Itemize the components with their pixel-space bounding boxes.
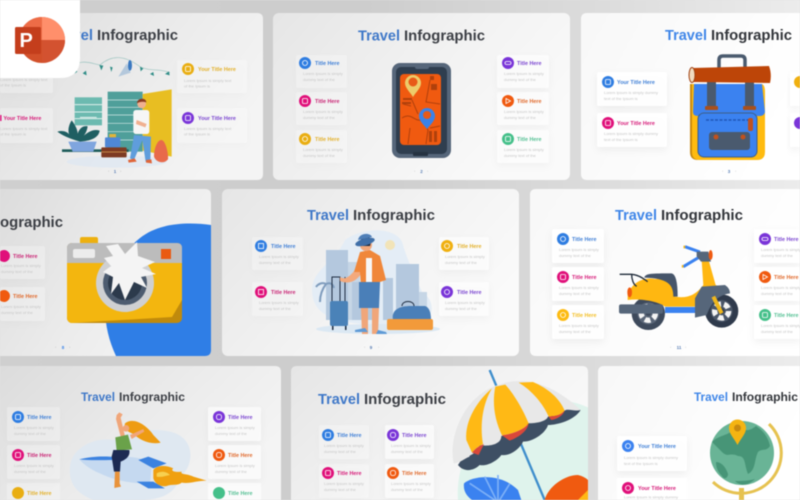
card: blue: text of the Ipsum is [624,461,658,466]
card: pink, cropped: Lorem Ipsum is simply [1,263,41,268]
card: purple: dummy text of the [391,449,424,454]
slide 7: rocket [0,366,281,500]
card: purple [439,282,489,316]
card: pink: Lorem Ipsum is simply [259,300,299,305]
card: yellow: Lorem Ipsum is simply [559,323,599,328]
card: orange [497,92,549,125]
slide 7 title: Travel [81,390,115,404]
card: pink, cropped: Title Here [13,254,37,260]
card: pink: Lorem Ipsum is simply dummy [624,494,678,500]
slide 5 title [307,207,435,224]
card: blue: dummy text of the [14,431,47,436]
pagination [722,168,737,174]
slide 3 title [665,27,792,44]
card: yellow: Title Here [457,244,481,250]
pagination: ‹ [670,344,672,350]
card: yellow: dummy text of the [559,329,592,334]
card: pink: dummy text of the [259,306,292,311]
card: yellow [439,237,489,270]
card: green: dummy text of the [504,153,537,158]
card: orange: dummy text of the [504,115,537,120]
card: blue [319,425,369,459]
card: yellow: Title Here [315,137,339,143]
card: blue: Lorem Ipsum is simply [14,425,54,430]
slide 1 title: Travel [50,27,93,44]
card: blue: text of the Ipsum is [604,96,638,101]
slide 3 title: Travel [665,27,707,44]
card: blue: dummy text of the [303,77,336,82]
slide 1 title [50,27,178,44]
slide 6 panel [530,189,800,356]
card: orange: Title Here [774,275,798,281]
card: pink [7,445,60,479]
slide 3 panel [581,13,800,180]
pagination: › [120,168,122,174]
card: right top [177,60,247,93]
card: green: Lorem Ipsum is simply [504,147,544,152]
card: yellow: Lorem Ipsum is simply [445,254,485,259]
card: green [497,130,549,163]
card: pink: Lorem Ipsum is simply [14,463,54,468]
pagination [108,168,122,174]
card: yellow: dummy text of the [303,153,336,158]
card: pink [319,464,369,498]
card: purple: Lorem Ipsum is simply [761,247,800,252]
card: blue [296,55,347,88]
blue backdrop shape [105,223,211,356]
slide 9 title: Travel [694,390,728,404]
card: purple [754,229,800,263]
pagination: ‹ [364,344,366,350]
card: orange: Lorem Ipsum is simply [504,109,544,114]
slide 6 title [615,207,743,224]
card: right top: Lorem Ipsum is simply text [184,78,232,83]
card: green [208,483,261,500]
pagination: › [735,168,737,174]
card: blue: Title Here [572,237,596,243]
card: purple: Lorem Ipsum is simply [391,443,431,448]
card: orange: Title Here [517,99,541,105]
illustration: beach umbrella and shells [453,370,588,500]
card: left bottom: Lorem Ipsum is simply text [0,126,48,131]
card: blue: dummy text of the [559,253,592,258]
card: blue: dummy text of the [259,260,292,265]
card: blue [597,72,667,106]
card: left top [0,60,53,93]
card: orange: Lorem Ipsum is simply [215,463,255,468]
slide 7 title: Infographic [119,390,185,404]
card: purple: Title Here [774,237,798,243]
card: purple: Title Here [402,433,426,439]
card: pink [617,478,687,500]
slide 3 title: Infographic [711,27,792,44]
slide 1 title: Infographic [97,27,178,44]
card: blue: Lorem Ipsum is simply dummy [604,90,658,95]
card: pink: dummy text of the [324,487,357,492]
slide 4: camera [0,189,211,356]
slide 4 panel [0,189,211,356]
slide 9 title: Infographic [732,390,798,404]
card: pink: Your Title Here [638,486,676,492]
card: left bottom [0,108,53,143]
card: orange [385,464,434,498]
slide 8: beach umbrella [291,366,588,500]
card: blue [7,407,60,441]
slide 6 title: Travel [615,207,657,224]
card: pink: dummy text of the [559,291,592,296]
card: left top: Lorem Ipsum is simply text [0,77,48,82]
pagination [364,344,380,350]
card: pink: Lorem Ipsum is simply [559,285,599,290]
card: purple: Title Here [517,61,541,67]
pagination: 11 [677,345,682,350]
white tab [0,0,80,78]
slide 7 title [81,390,185,404]
card: pink: Title Here [315,99,339,105]
slide 9: globe [598,366,800,500]
card: blue: Title Here [271,244,295,250]
slide 5 title: Infographic [353,207,435,224]
pagination: › [378,344,380,350]
slide 1: door and traveller [0,13,263,180]
slide 2 panel [273,13,570,180]
slide 4 title: ographic [0,214,63,231]
card: orange: Title Here [402,471,426,477]
icon: PowerPoint logo: P [20,30,33,52]
pagination [670,344,687,350]
card: blue: Your Title Here [638,444,676,450]
card: blue: dummy text of the [324,449,357,454]
card: yellow [552,305,604,339]
card: blue [552,229,604,263]
slide 3: backpack [581,13,800,180]
card: purple [208,407,261,441]
card: green: Title Here [228,491,252,497]
card: orange, cropped: dummy text of the [1,310,34,315]
card: pink [296,92,347,125]
card: orange: Lorem Ipsum is simply [391,481,431,486]
card: purple [497,55,549,88]
pagination: 3 [728,169,731,174]
card: right top: Your Title Here [198,67,236,73]
card: green [754,305,800,339]
illustration: backpack [689,56,771,160]
slide 9 panel [598,366,800,500]
card: blue [252,237,303,270]
card: orange: Title Here [228,453,252,459]
slide 8 title: Travel [318,391,360,408]
slide 9 title [694,390,798,404]
illustration: camera [67,237,182,323]
card: yellow [296,130,347,163]
slide 8 title: Infographic [364,391,446,408]
card: purple: Lorem Ipsum is simply [504,71,544,76]
card: left bottom: of the Ipsum is [0,132,26,136]
pagination: › [685,344,687,350]
card: purple: Title Here [228,415,252,421]
card: blue: Lorem Ipsum is simply dummy [624,455,678,460]
pagination: › [69,344,71,350]
card: right bottom: Lorem Ipsum is simply text [184,126,232,131]
slide 6: scooter [530,189,800,356]
pagination: 8 [62,345,65,350]
pagination [414,168,429,174]
illustration: scooter [619,246,738,330]
card: blue: Lorem Ipsum is simply [324,443,364,448]
card: pink: Title Here [27,453,51,459]
pagination [55,344,71,350]
card: right bottom: of the Ipsum is [184,132,210,136]
card: orange: dummy text of the [761,291,794,296]
card: pink: Your Title Here [617,121,655,127]
slide 2 title [358,28,485,44]
card: purple [385,425,434,459]
card: yellow [7,483,60,500]
logo tab [0,0,80,78]
card: purple: Lorem Ipsum is simply [215,425,255,430]
slide 7 panel [0,366,281,500]
card: purple: dummy text of the [504,77,537,82]
card: purple: dummy text of the [761,253,794,258]
card: pink: Title Here [337,471,361,477]
pagination: 9 [370,345,373,350]
card: green: dummy text of the [761,329,794,334]
card: yellow: Title Here [572,313,596,319]
card: pink: dummy text of the [14,469,47,474]
card: pink: dummy text of the [303,115,336,120]
pagination: 2 [420,169,423,174]
illustration: tourist with luggage [312,230,440,334]
card: right top: of the Ipsum is [184,84,210,88]
card: pink, cropped: dummy text of the [1,269,34,274]
pagination: ‹ [722,168,724,174]
slide 5 panel [222,189,519,356]
card: blue: Lorem Ipsum is simply [559,247,599,252]
illustration: traveller at door [57,58,172,168]
slide 5: tourist in city [222,189,519,356]
card: blue: Your Title Here [617,80,655,86]
card: green: Title Here [517,137,541,143]
illustration: woman riding rocket [70,412,207,500]
card: green: Lorem Ipsum is simply [761,323,800,328]
card: pink: Lorem Ipsum is simply dummy [604,131,658,136]
pagination: ‹ [108,168,110,174]
card: pink [252,282,303,316]
card: yellow: Lorem Ipsum is simply [303,147,343,152]
card: orange: Lorem Ipsum is simply [761,285,800,290]
illustration: globe with pin [710,420,781,500]
card: orange, cropped: Title Here [13,294,37,300]
card: orange: dummy text of the [391,487,424,492]
pagination: 1 [114,169,117,174]
card: green: Title Here [774,313,798,319]
card: blue: Title Here [27,415,51,421]
card: orange, cropped [0,287,45,321]
card: pink [552,267,604,301]
slide 2 title: Travel [358,28,400,44]
card: pink [597,113,667,147]
card: pink: text of the Ipsum is [604,137,638,142]
card: yellow: Title Here [27,491,51,497]
illustration: phone with map [392,63,451,158]
card: blue: Title Here [337,433,361,439]
card: purple, cropped [790,113,800,147]
slide 8 panel [291,366,588,500]
pagination: › [427,168,429,174]
card: blue: Lorem Ipsum is simply [303,71,343,76]
card: purple: dummy text of the [215,431,248,436]
slide 1 panel [0,13,263,180]
card: blue [617,436,687,471]
card: orange, cropped: Lorem Ipsum is simply [1,304,41,309]
card: left bottom: Your Title Here [4,116,41,122]
card: purple: Lorem Ipsum is simply [445,300,485,305]
card: pink: Lorem Ipsum is simply [324,481,364,486]
card: right bottom: Your Title Here [198,116,236,122]
slide 5 title: Travel [307,207,349,224]
pagination: ‹ [414,168,416,174]
card: orange: dummy text of the [215,469,248,474]
card: pink: Title Here [271,290,295,296]
card: yellow, cropped [790,72,800,106]
card: pink: Lorem Ipsum is simply [303,109,343,114]
card: orange [208,445,261,479]
slide 6 title: Infographic [661,207,743,224]
pagination: ‹ [55,344,57,350]
card: left top: of the Ipsum is [0,82,26,88]
card: blue: Lorem Ipsum is simply [259,254,299,259]
card: right bottom [177,108,247,143]
card: blue: Title Here [315,61,339,67]
slide 2 title: Infographic [404,28,485,44]
slide 2: phone map [273,13,570,180]
card: purple: dummy text of the [445,306,478,311]
card: pink, cropped [0,246,45,279]
card: orange [754,267,800,301]
card: purple: Title Here [457,290,481,296]
slide 8 title [318,391,446,408]
card: yellow: dummy text of the [445,260,478,265]
card: pink: Title Here [572,275,596,281]
